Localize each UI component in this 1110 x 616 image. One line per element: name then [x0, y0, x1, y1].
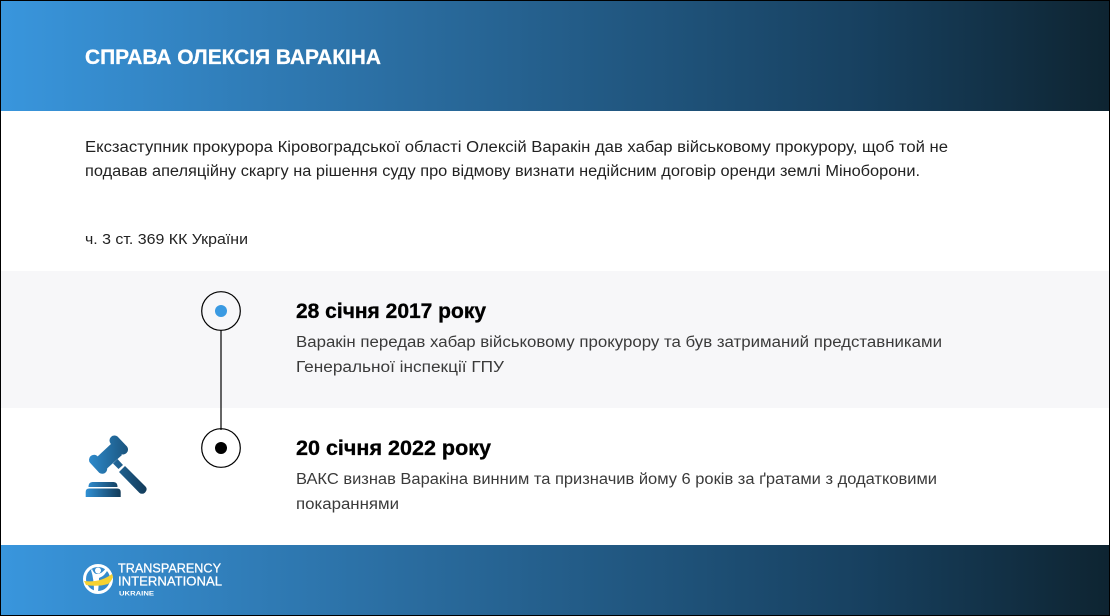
logo wordmark: INTERNATIONAL [118, 574, 222, 588]
event 2017 description: Варакін передав хабар військовому прокурору та був затриманий представниками [296, 334, 942, 351]
title: СПРАВА ОЛЕКСІЯ ВАРАКІНА [85, 46, 381, 69]
header band [0, 0, 1110, 111]
event 2017 [296, 299, 942, 376]
event 2022 description [296, 471, 937, 513]
legal article reference: ч. 3 ст. 369 КК України [85, 231, 248, 248]
event 2017 description [296, 334, 942, 376]
event 2022 date: 20 січня 2022 року [296, 436, 491, 460]
logo emblem [84, 566, 113, 592]
intro text [85, 139, 948, 180]
logo wordmark: UKRAINE [119, 590, 155, 598]
timeline [201, 291, 241, 468]
intro text: подавав апеляційну скаргу на рішення суду про відмову визнати недійсним договір оренди землі Міноборони. [85, 163, 920, 180]
event 2022 description: ВАКС визнав Варакіна винним та призначив йому 6 років за ґратами з додатковими [296, 471, 937, 488]
footer band [0, 545, 1110, 616]
event 2022 description: покараннями [296, 496, 399, 513]
icon: gavel [86, 436, 147, 497]
logo wordmark [118, 562, 222, 598]
marker: 2022 [202, 429, 240, 467]
logo: Transparency International Ukraine [83, 562, 222, 598]
event 2017 date: 28 січня 2017 року [296, 299, 486, 323]
logo wordmark: TRANSPARENCY [118, 562, 222, 576]
intro text: Ексзаступник прокурора Кіровоградської області Олексій Варакін дав хабар військовому прокурору, щоб той не [85, 139, 948, 156]
panel: first event background [0, 271, 1110, 408]
event 2022 [296, 436, 937, 513]
event 2017 description: Генеральної інспекції ГПУ [296, 359, 504, 376]
marker: 2017 [202, 292, 240, 330]
